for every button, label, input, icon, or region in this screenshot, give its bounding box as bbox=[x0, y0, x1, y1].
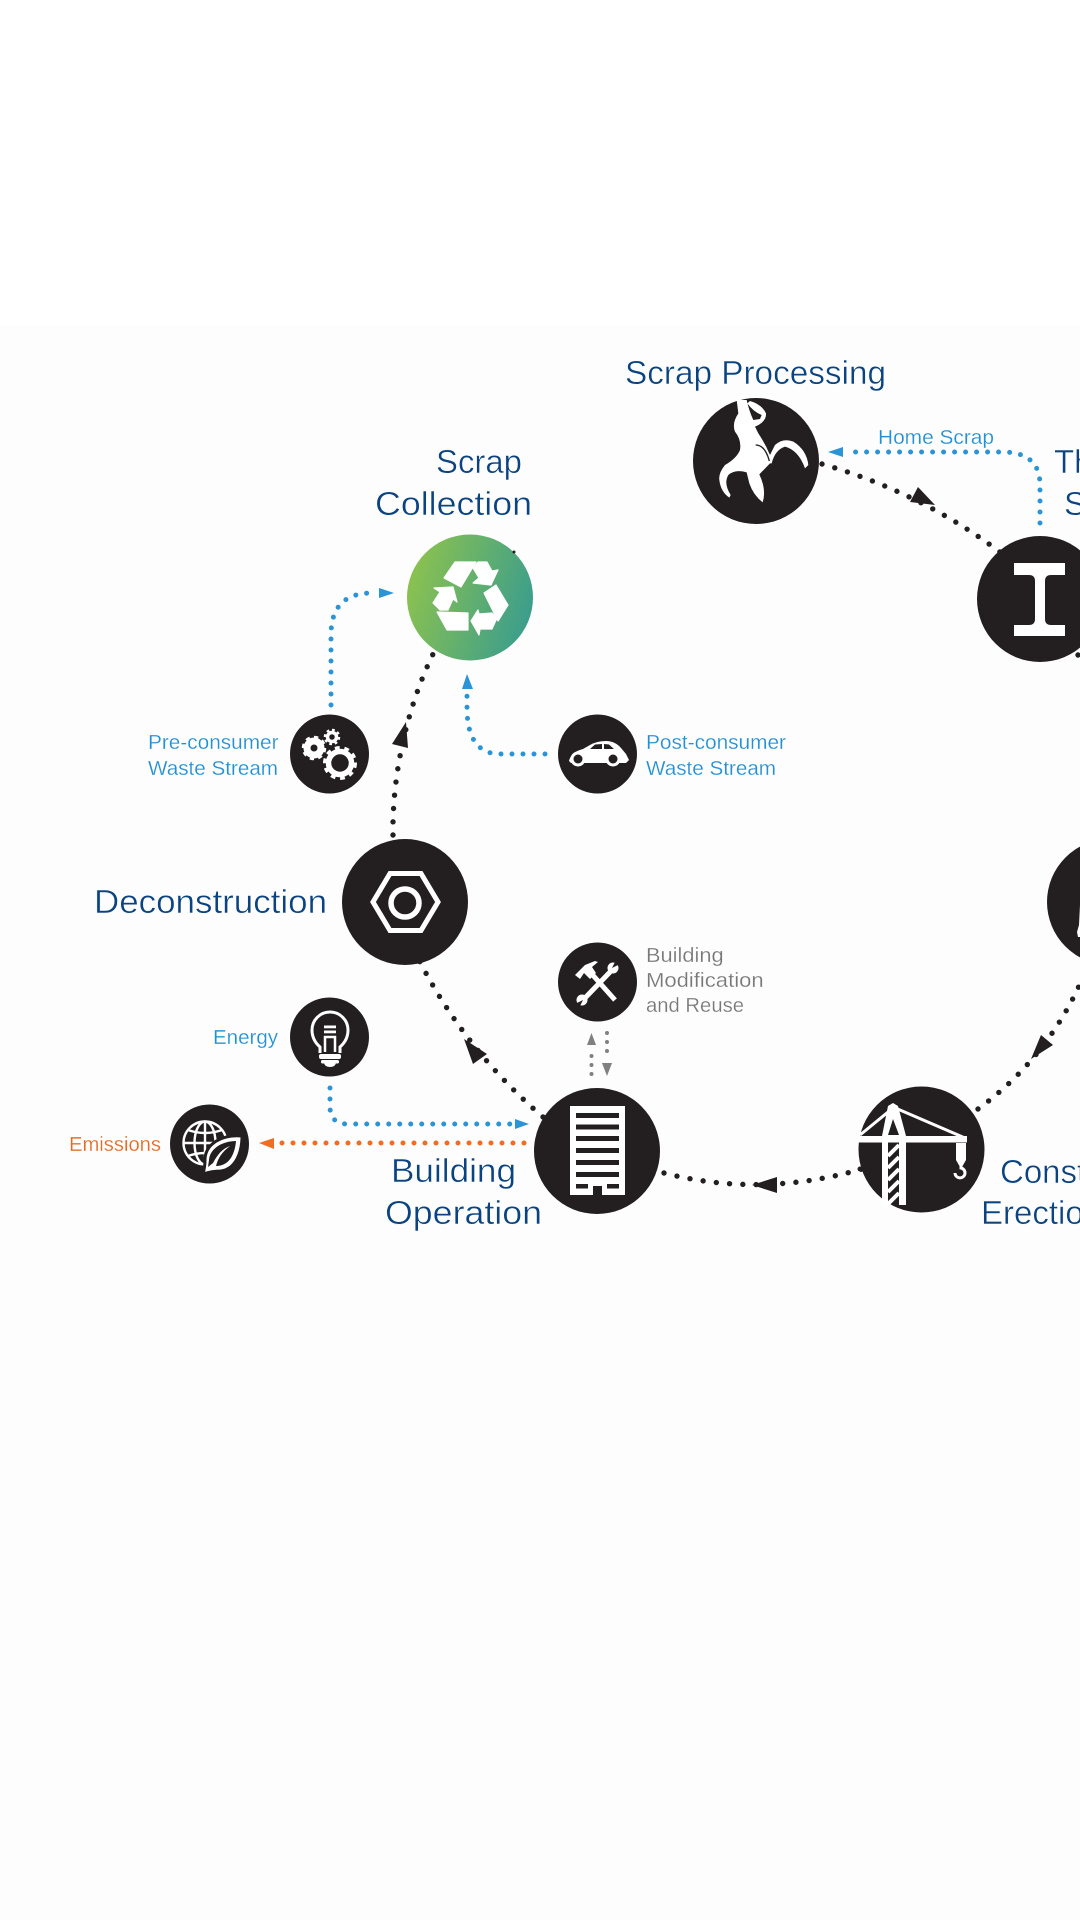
arrow: scrap processing to steel bbox=[822, 464, 1000, 552]
arrow: building operation to deconstruction bbox=[419, 960, 543, 1117]
icon: hammer and wrench bbox=[575, 960, 620, 1008]
label: energy: Energy bbox=[213, 1027, 278, 1049]
node: building operation bbox=[534, 1088, 660, 1214]
label: pre-consumer waste stream bbox=[148, 732, 279, 780]
arrow: fabrication to construction bbox=[978, 984, 1080, 1109]
label: pre-consumer waste stream: Pre-consumer bbox=[148, 732, 279, 754]
label: emissions: Emissions bbox=[69, 1134, 161, 1156]
heading: scrap processing: Scrap Processing bbox=[625, 354, 886, 391]
node: steel bbox=[977, 536, 1080, 662]
node: post-consumer waste stream bbox=[558, 714, 637, 794]
node: construction and erection bbox=[858, 1086, 984, 1212]
icon: recycling symbol bbox=[433, 562, 508, 635]
arrow: energy input bbox=[330, 1088, 529, 1129]
heading: deconstruction: Deconstruction bbox=[94, 883, 327, 920]
arrow: emissions output bbox=[259, 1138, 524, 1149]
label: post-consumer waste stream bbox=[646, 732, 786, 780]
icon: hex nut bbox=[373, 874, 438, 930]
node: scrap processing bbox=[693, 398, 819, 524]
node: deconstruction bbox=[342, 839, 468, 965]
icon: light bulb bbox=[312, 1012, 348, 1067]
heading: scrap collection: Scrap bbox=[436, 443, 522, 480]
arrow: deconstruction to scrap collection bbox=[392, 650, 435, 835]
arrow: home scrap bbox=[828, 447, 1040, 523]
label: building modification and reuse: Modification bbox=[646, 970, 764, 992]
heading: building operation bbox=[385, 1152, 542, 1231]
icon: tower crane bbox=[859, 1103, 967, 1205]
heading: scrap collection bbox=[375, 443, 532, 522]
label: pre-consumer waste stream: Waste Stream bbox=[148, 758, 278, 780]
label: building modification and reuse bbox=[646, 945, 764, 1017]
heading: steel stage bbox=[1054, 443, 1080, 522]
arrow: building modification two-way bbox=[587, 1033, 612, 1076]
icon: car bbox=[569, 741, 629, 766]
heading: home scrap: Home Scrap bbox=[878, 427, 994, 449]
icon: gears bbox=[304, 730, 355, 778]
node: pre-consumer waste stream bbox=[290, 714, 369, 794]
icon: office building bbox=[570, 1106, 625, 1195]
heading: construction and erection bbox=[981, 1153, 1080, 1231]
node: fabrication stage bbox=[1047, 839, 1080, 965]
node: scrap collection bbox=[407, 534, 533, 660]
heading: building operation: Building bbox=[391, 1152, 516, 1189]
node: building modification bbox=[558, 942, 637, 1022]
icon: scrap grapple claw bbox=[719, 400, 808, 502]
label: post-consumer waste stream: Waste Stream bbox=[646, 758, 776, 780]
heading: scrap collection: Collection bbox=[375, 485, 532, 522]
arrow: post-consumer waste stream bbox=[462, 674, 545, 754]
arrow: pre-consumer waste stream bbox=[331, 588, 394, 705]
heading: building operation: Operation bbox=[385, 1194, 542, 1231]
node: emissions bbox=[170, 1104, 249, 1184]
label: building modification and reuse: Building bbox=[646, 945, 724, 967]
label: post-consumer waste stream: Post-consumer bbox=[646, 732, 786, 754]
node: energy bbox=[290, 998, 369, 1076]
icon: globe and leaf bbox=[184, 1122, 242, 1174]
arrow: construction to building operation bbox=[664, 1169, 862, 1193]
label: building modification and reuse: and Reuse bbox=[646, 995, 744, 1017]
icon: i-beam bbox=[1014, 563, 1065, 636]
arrow: steel to next stage bbox=[1075, 652, 1080, 658]
